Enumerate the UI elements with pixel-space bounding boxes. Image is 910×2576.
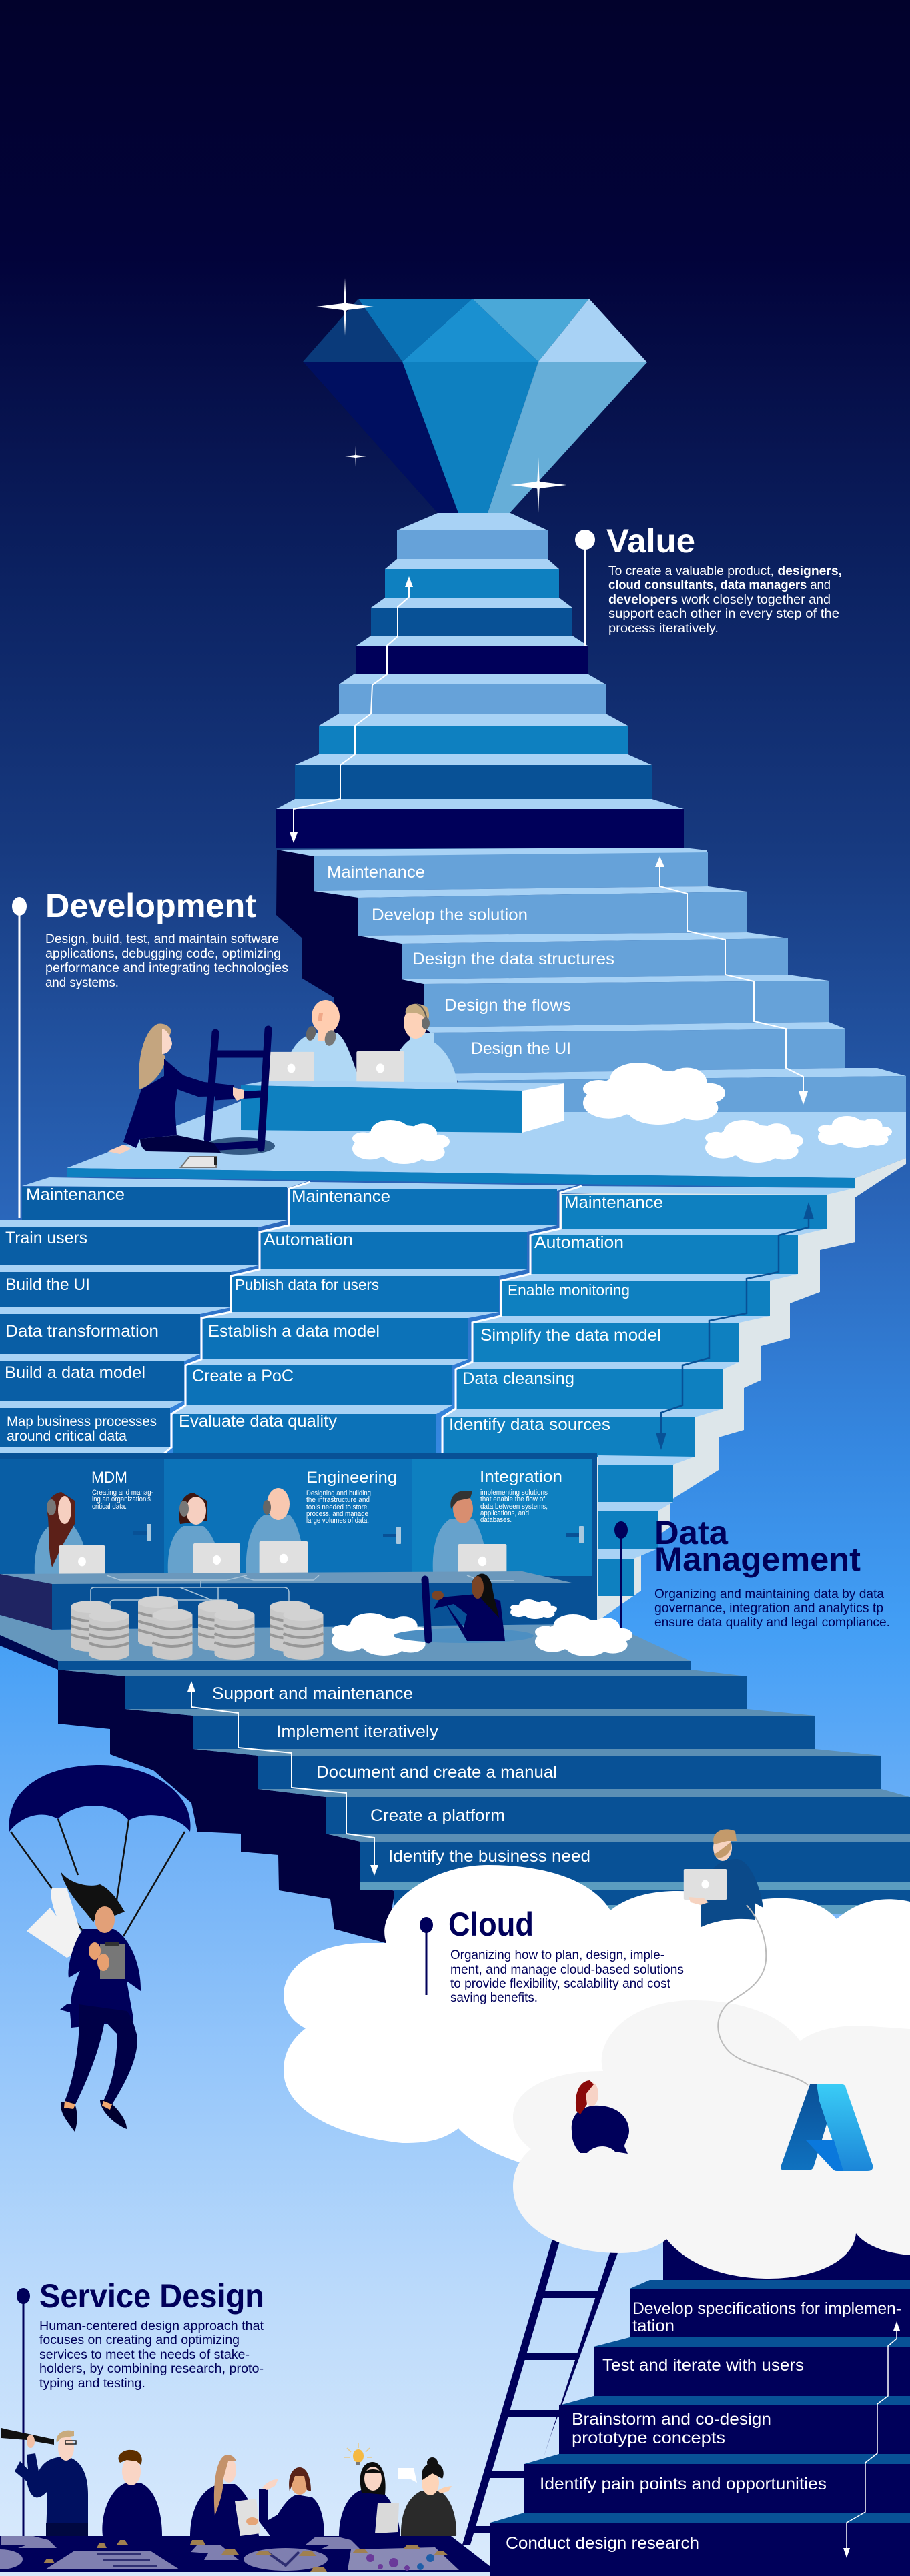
service design heading and text: services to meet the needs of stake- bbox=[39, 2348, 250, 2362]
development staircase: Maintenance bbox=[327, 863, 425, 882]
data staircase column 3: Enable monitoring bbox=[508, 1281, 630, 1299]
service design person 2 bbox=[102, 2450, 162, 2536]
door handles bbox=[133, 1524, 584, 1544]
value staircase bbox=[276, 513, 684, 848]
service design staircase: Brainstorm and co-design bbox=[572, 2410, 771, 2429]
development staircase: Design the data structures bbox=[412, 950, 614, 969]
development heading and text bbox=[12, 887, 288, 1218]
clouds on development platform bbox=[352, 1063, 892, 1164]
Integration text bbox=[480, 1468, 562, 1524]
data management heading and text bbox=[614, 1514, 890, 1630]
development platform bbox=[67, 1101, 906, 1197]
development heading and text: applications, debugging code, optimizing bbox=[45, 947, 281, 961]
development staircase shadow bbox=[276, 850, 458, 1084]
service design staircase: tation bbox=[632, 2317, 674, 2335]
icon: Azure logo bbox=[781, 2084, 873, 2171]
engineering worker man bbox=[246, 1488, 308, 1576]
value heading and text: cloud consultants, data managers and bbox=[608, 578, 831, 592]
cloud woman sitting bbox=[572, 2080, 629, 2154]
panel: data management teams bbox=[0, 1453, 597, 1620]
service design staircase: prototype concepts bbox=[572, 2429, 725, 2447]
service design staircase: Identify pain points and opportunities bbox=[540, 2475, 827, 2493]
data staircase column 1: Train users bbox=[5, 1229, 87, 1247]
data staircase column 2: Establish a data model bbox=[208, 1322, 380, 1341]
Integration text: applications, and bbox=[480, 1509, 529, 1517]
data staircase side wall bbox=[560, 1188, 855, 1621]
development desk bbox=[241, 1081, 564, 1133]
cloud engineer with laptop bbox=[684, 1829, 763, 1927]
data path arrow bbox=[656, 1202, 814, 1450]
table with research maps bbox=[0, 2536, 490, 2572]
cloud staircase: Support and maintenance bbox=[212, 1684, 413, 1703]
data staircase column 1: Map business processes bbox=[7, 1414, 157, 1429]
cloud staircase: Document and create a manual bbox=[316, 1763, 557, 1782]
data staircase column 2 bbox=[173, 1182, 577, 1454]
Engineering text: process, and manage bbox=[306, 1510, 368, 1518]
data staircase column 1: around critical data bbox=[7, 1429, 127, 1444]
development heading and text: Development bbox=[45, 887, 256, 924]
cloud heading and text: saving benefits. bbox=[450, 1991, 538, 2005]
Integration text: data between systems, bbox=[480, 1503, 548, 1511]
seated woman on data platform bbox=[394, 1574, 534, 1643]
data staircase column 2: Evaluate data quality bbox=[179, 1412, 338, 1431]
cloud path arrow bbox=[187, 1681, 378, 1876]
data staircase column 3: Maintenance bbox=[564, 1193, 663, 1212]
clouds on data platform bbox=[332, 1599, 632, 1656]
service design staircase: Conduct design research bbox=[506, 2534, 699, 2553]
value heading and text: developers work closely together and bbox=[608, 593, 831, 607]
data management heading and text: governance, integration and analytics tp bbox=[654, 1601, 883, 1616]
value heading and text: To create a valuable product, designers, bbox=[608, 564, 842, 578]
laptops on development desk bbox=[268, 1051, 404, 1085]
development heading and text: and systems. bbox=[45, 976, 119, 990]
sparkle stars bbox=[316, 278, 566, 513]
service design person with telescope bbox=[1, 2428, 88, 2536]
development staircase bbox=[277, 848, 906, 1121]
development staircase: Develop the solution bbox=[372, 906, 528, 924]
Integration text: that enable the flow of bbox=[480, 1495, 546, 1503]
service design staircase: Test and iterate with users bbox=[602, 2356, 804, 2375]
developer: man with headset left bbox=[282, 1000, 360, 1084]
data management heading and text: Management bbox=[654, 1541, 861, 1578]
Integration text: databases. bbox=[480, 1516, 512, 1524]
data staircase column 2: Create a PoC bbox=[192, 1367, 294, 1385]
Engineering text: tools needed to store, bbox=[306, 1503, 369, 1511]
Engineering text: Engineering bbox=[306, 1469, 397, 1487]
lower staircase shadow bbox=[58, 1670, 395, 1943]
data staircase column 3 bbox=[444, 1186, 855, 1457]
value heading and text bbox=[575, 522, 842, 646]
ladder bbox=[462, 2234, 618, 2545]
data staircase column 1 bbox=[0, 1177, 308, 1454]
cloud staircase bbox=[58, 1670, 910, 1914]
Engineering text: large volumes of data. bbox=[306, 1517, 369, 1525]
service design person 6 with speech bubble bbox=[398, 2457, 456, 2536]
value heading and text: support each other in every step of the bbox=[608, 607, 839, 621]
MDM text bbox=[91, 1469, 153, 1511]
data staircase column 2: Publish data for users bbox=[235, 1276, 379, 1293]
data management heading and text: Organizing and maintaining data by data bbox=[654, 1587, 884, 1601]
column divider lines bbox=[163, 1182, 582, 1454]
cloud staircase: Create a platform bbox=[370, 1806, 505, 1825]
Integration text: Integration bbox=[480, 1468, 562, 1486]
value heading and text: Value bbox=[606, 522, 695, 560]
grey cloud bbox=[513, 2000, 910, 2279]
data staircase column 3: Automation bbox=[534, 1233, 624, 1252]
data staircase column 3: Data cleansing bbox=[462, 1369, 574, 1388]
data management heading and text: Data bbox=[654, 1514, 729, 1551]
MDM worker bbox=[35, 1492, 105, 1578]
MDM text: ing an organization's bbox=[92, 1495, 151, 1503]
development staircase: Design the flows bbox=[444, 996, 571, 1015]
cloud heading and text: ment, and manage cloud-based solutions bbox=[450, 1963, 684, 1977]
service design heading and text: Human-centered design approach that bbox=[39, 2319, 264, 2333]
data staircase column 1: Data transformation bbox=[5, 1322, 159, 1341]
service design person 3 with paper bbox=[190, 2455, 260, 2536]
data staircase column 1: Build the UI bbox=[5, 1275, 90, 1294]
development heading and text: Design, build, test, and maintain software bbox=[45, 932, 279, 946]
light strip at page bottom bbox=[0, 2572, 490, 2576]
development heading and text: performance and integrating technologies bbox=[45, 961, 288, 975]
cloud heading and text: Organizing how to plan, design, imple- bbox=[450, 1948, 664, 1962]
Integration text: implementing solutions bbox=[480, 1489, 548, 1497]
MDM text: critical data. bbox=[92, 1503, 127, 1511]
service design heading and text: holders, by combining research, proto- bbox=[39, 2362, 264, 2376]
data staircase column 2: Automation bbox=[264, 1231, 353, 1249]
database network lines bbox=[91, 1575, 514, 1611]
Engineering text: Designing and building bbox=[306, 1489, 371, 1497]
service design path arrow bbox=[843, 2321, 900, 2558]
clipboard on platform bbox=[181, 1157, 217, 1167]
diamond bbox=[303, 299, 647, 513]
MDM text: MDM bbox=[91, 1469, 127, 1487]
data platform: floor bbox=[0, 1615, 691, 1670]
service design person 4 bbox=[259, 2467, 324, 2536]
data staircase column 1: Maintenance bbox=[26, 1185, 125, 1204]
cloud heading and text: to provide flexibility, scalability and cost bbox=[450, 1977, 671, 1991]
cloud staircase: Identify the business need bbox=[388, 1847, 590, 1866]
development staircase: Design the UI bbox=[471, 1039, 571, 1058]
developer: man with headset right bbox=[388, 1004, 458, 1084]
data management heading and text: ensure data quality and legal compliance. bbox=[654, 1616, 890, 1630]
integration worker man bbox=[433, 1491, 506, 1579]
Engineering text: the infrastructure and bbox=[306, 1496, 370, 1504]
database cylinders bbox=[71, 1596, 323, 1660]
cloud staircase: Implement iteratively bbox=[276, 1722, 439, 1741]
data platform: desk front and side bbox=[0, 1574, 573, 1630]
service design heading and text: typing and testing. bbox=[39, 2377, 145, 2391]
data platform: desk top bbox=[0, 1571, 572, 1584]
cloud heading and text: Cloud bbox=[448, 1906, 534, 1943]
service design heading and text: Service Design bbox=[39, 2277, 264, 2315]
service design heading and text: focuses on creating and optimizing bbox=[39, 2333, 240, 2347]
development path arrow bbox=[655, 856, 808, 1105]
engineering worker woman bbox=[168, 1493, 240, 1577]
service design heading and text bbox=[17, 2277, 264, 2536]
value path arrow bbox=[290, 576, 413, 843]
Engineering text bbox=[306, 1469, 397, 1525]
extra steps behind panel bbox=[598, 1455, 695, 1596]
value heading and text: process iteratively. bbox=[608, 622, 719, 636]
cable to Azure logo bbox=[718, 1905, 808, 2085]
cloud heading and text bbox=[420, 1906, 684, 2005]
parachuting person with paper roll bbox=[9, 1765, 191, 2132]
data staircase column 3: Identify data sources bbox=[449, 1415, 610, 1434]
white cloud bbox=[284, 1865, 910, 2162]
developer: seated woman on chair bbox=[107, 1024, 275, 1155]
data staircase column 1: Build a data model bbox=[5, 1363, 145, 1382]
service design staircase bbox=[490, 2231, 910, 2576]
data staircase column 2: Maintenance bbox=[292, 1187, 390, 1206]
MDM text: Creating and manag- bbox=[92, 1489, 153, 1497]
data staircase column 3: Simplify the data model bbox=[480, 1326, 661, 1345]
service design staircase: Develop specifications for implemen- bbox=[632, 2299, 901, 2318]
service design person 5 with paper and idea bulb bbox=[339, 2443, 400, 2536]
